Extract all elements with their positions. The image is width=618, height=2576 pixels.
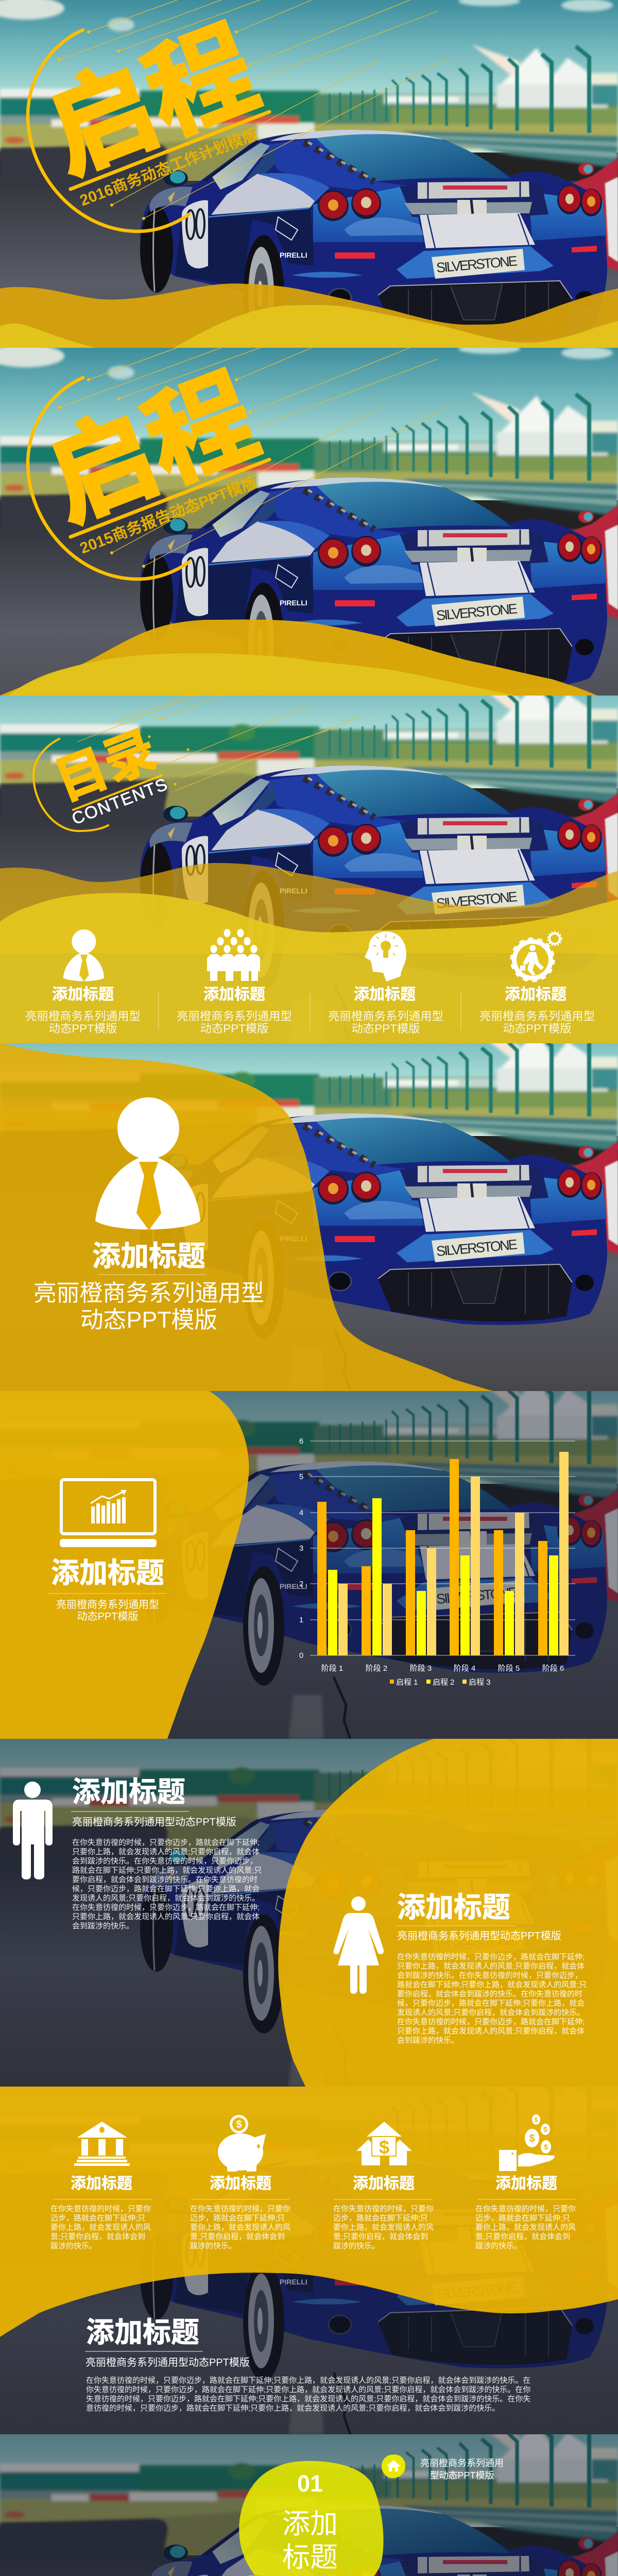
column 2 title: 添加标题 [203,986,265,1003]
column 3 title: 添加标题 [353,2175,415,2192]
slide 5: bar chart [0,1391,618,1739]
subtitle: 动态PPT模版 [80,1307,217,1333]
column 1 text: 要你上路，就会发现诱人的风 [50,2223,151,2232]
lower body text: 你失意彷徨的时候，只要你迈步，路就会在脚下延伸;只要你上路，就会发现诱人的风景;只要你启程，就会体会到跋涉的快乐。在你 [86,2385,530,2394]
column 1 text: 迈步，路就会在脚下延伸;只 [50,2214,145,2223]
slide 7: finance columns [0,2087,618,2434]
column 4 text: 在你失意彷徨的时候，只要你 [475,2204,576,2213]
slide 6: male and female text blocks [0,1739,618,2087]
bar chart: 0 [299,1651,303,1660]
slide 2: cover 2015 [0,348,618,696]
column 4 title: 添加标题 [495,2175,557,2192]
column 2 text: 迈步，路就会在脚下延伸;只 [190,2214,285,2223]
left body text: 在你失意彷徨的时候，只要你迈步，路就会在脚下延伸; [72,1838,260,1847]
legend: 启程 3 [469,1678,491,1687]
column 3 text: 亮丽橙商务系列通用型 [328,1010,443,1023]
left body text: 会到跋涉的快乐。 [72,1922,134,1930]
column 3 [328,931,443,1035]
lower body text: 意彷徨的时候，只要你迈步，路就会在脚下延伸;只要你上路，就会发现诱人的风景;只要你启程，就会体会到跋涉的快乐。 [86,2403,500,2413]
column 4 [475,2114,576,2250]
icon: crowd [207,929,260,981]
bar chart: 3 [299,1544,303,1553]
diagonal accent lines [58,0,449,220]
right body text: 只要你上路，就会发现诱人的风景;只要你启程，就会体 [397,2027,585,2036]
top yellow panel [0,2087,618,2337]
lower title: 添加标题 [86,2316,199,2348]
left title: 添加标题 [72,1776,185,1808]
blob 01: 01 [297,2470,323,2497]
right yellow panel [278,1739,618,2087]
blob 02 [182,2575,327,2576]
column 2 [190,2115,290,2250]
column 1 text: 在你失意彷徨的时候，只要你 [50,2204,151,2213]
bar chart: 6 [299,1437,303,1446]
right body text: 在你失意彷徨的时候，只要你迈步，路就会在脚下延伸; [397,2017,585,2026]
column 4 text: 跋涉的快乐。 [475,2242,522,2250]
column 3 text: 动态PPT模版 [351,1022,420,1035]
column 1 text: 跋涉的快乐。 [50,2242,97,2250]
left body text: 要你启程，就会体会到跋涉的快乐。在你失意彷徨的时 [72,1875,258,1884]
callout: home [382,2454,504,2481]
column 4 [479,932,595,1035]
slide 4: section intro [0,1043,618,1391]
column 2 title: 添加标题 [210,2175,271,2192]
column 3 text: 跋涉的快乐。 [333,2242,380,2250]
title arc [28,30,189,231]
bar chart: 阶段 2 [366,1664,387,1673]
icon: business person [63,929,104,981]
column 4 text: 动态PPT模版 [503,1022,572,1035]
icon: rising arrows with dollar: $ [379,2137,389,2158]
front wave [8,653,515,696]
column 2 text: 亮丽橙商务系列通用型 [177,1010,292,1023]
right subtitle: 亮丽橙商务系列通用型动态PPT模版 [397,1930,561,1942]
left body text: 在你失意彷徨的时候，只要你迈步，路就会在脚下延伸; [72,1903,260,1912]
icon: hand with coins: $ [535,2116,538,2124]
left body text: 发现诱人的风景;只要你启程，就会体会到跋涉的快乐。 [72,1894,260,1903]
icon: gear with runner [512,932,561,980]
column 3 text: 要你上路，就会发现诱人的风 [333,2223,434,2232]
bar chart: 阶段 4 [454,1664,475,1673]
title: 启程 [32,356,271,542]
back wave [0,283,618,348]
column 1 text: 景;只要你启程，就会体会到 [50,2232,145,2241]
subtitle: 2015商务报告动态PPT模版 [78,474,259,557]
title underline [71,112,269,189]
column 4 text: 亮丽橙商务系列通用型 [479,1010,595,1023]
column 3 title: 添加标题 [354,986,416,1003]
title underline [71,460,269,537]
column 3 text: 迈步，路就会在脚下延伸;只 [333,2214,428,2223]
column 1 title: 添加标题 [52,986,114,1003]
icon: hand with coins: $ [544,2143,548,2151]
diagonal accent lines [58,348,449,568]
right title: 添加标题 [397,1891,510,1923]
column 1 [25,929,141,1035]
right body text: 只要你上路，就会发现诱人的风景;只要你启程，就会体 [397,1962,585,1971]
subtitle: 动态PPT模版 [77,1611,138,1622]
title: 添加标题 [51,1557,164,1589]
callout: home: 亮丽橙商务系列通用 [420,2458,504,2468]
right body text: 在你失意彷徨的时候，只要你迈步，路就会在脚下延伸; [397,1952,585,1961]
slide 8: three overlapping blobs [0,2434,618,2576]
column 2 text: 动态PPT模版 [200,1022,269,1035]
column 2 text: 在你失意彷徨的时候，只要你 [190,2204,290,2213]
contents underline [73,775,162,810]
right body text: 发现诱人的风景;只要你启程，就会体会到跋涉的快乐。 [397,2008,585,2017]
blob 01 [239,2461,384,2576]
legend: 启程 2 [433,1678,455,1687]
column 1 text: 动态PPT模版 [48,1022,117,1035]
front wave left [0,324,95,348]
right body text: 路就会在脚下延伸;只要你上路，就会发现诱人的风景;只 [397,1980,587,1989]
left body text: 候，只要你迈步，路就会在脚下延伸;只要你上路，就会 [72,1885,260,1893]
subtitle: 2016商务动态工作计划模版 [78,126,260,210]
blob 01: 标题 [282,2542,338,2573]
column 3 text: 在你失意彷徨的时候，只要你 [333,2204,434,2213]
column 4 title: 添加标题 [505,986,566,1003]
diagonal accent lines [77,696,360,791]
title: 添加标题 [92,1240,205,1272]
title arc [28,378,189,579]
front wave [0,893,618,1043]
icon: hand with coins: $ [529,2133,535,2144]
icon: woman [334,1896,384,1994]
slide 1: cover 2016 [0,0,618,348]
subtitle: 亮丽橙商务系列通用型 [33,1280,264,1306]
column 2 text: 要你上路，就会发现诱人的风 [190,2223,290,2232]
right body text: 会到跋涉的快乐。 [397,2036,459,2045]
column 1 [50,2122,152,2250]
icon: piggy bank with coin [218,2115,266,2172]
back wave [0,863,618,953]
blob 01: 添加 [282,2509,338,2539]
bar chart: 阶段 6 [542,1664,564,1673]
column 4 text: 迈步，路就会在脚下延伸;只 [475,2214,570,2223]
bar chart: 1 [299,1616,303,1624]
left body text: 只要你上路，就会发现诱人的风景;只要你启程，就会体 [72,1912,260,1921]
left body text: 只要你上路，就会发现诱人的风景;只要你启程，就会体 [72,1848,260,1856]
legend: 启程 1 [396,1678,418,1687]
yellow panel [0,1391,249,1739]
icon: hand with coins: $ [543,2125,547,2133]
icon: man [13,1782,53,1879]
lower body text: 在你失意彷徨的时候，只要你迈步，路就会在脚下延伸;只要你上路，就会发现诱人的风景;只要你启程，就会体会到跋涉的快乐。在 [86,2376,530,2385]
lower body text: 失意彷徨的时候，只要你迈步，路就会在脚下延伸;只要你上路，就会发现诱人的风景;只要你启程，就会体会到跋涉的快乐。在你失 [86,2394,530,2403]
column 2 text: 景;只要你启程，就会体会到 [190,2232,285,2241]
slide 3: contents [0,696,618,1043]
icon: hand with coins [499,2114,555,2171]
contents arc [33,739,108,831]
yellow panel [0,1043,493,1391]
left body text: 会到跋涉的快乐。在你失意彷徨的时候，只要你迈步， [72,1856,258,1866]
bar chart: 阶段 3 [410,1664,432,1673]
contents title: 目录 [47,721,164,811]
icon: business person [95,1097,200,1230]
legend [390,1678,491,1687]
icon: piggy bank with coin: $ [236,2119,242,2130]
right body text: 候，只要你迈步，路就会在脚下延伸;只要你上路，就会 [397,1999,585,2008]
column 1 text: 亮丽橙商务系列通用型 [25,1010,141,1023]
bar chart: 5 [299,1472,303,1481]
column 3 [333,2122,434,2250]
column 4 text: 景;只要你启程，就会体会到 [475,2232,570,2241]
bar chart: 2 [299,1580,303,1588]
column 2 text: 跋涉的快乐。 [190,2242,236,2250]
right body text: 会到跋涉的快乐。在你失意彷徨的时候，只要你迈步， [397,1971,582,1980]
left subtitle: 亮丽橙商务系列通用型动态PPT模版 [72,1816,236,1828]
title: 启程 [32,8,271,194]
icon: laptop with chart [60,1480,157,1547]
bar chart: 阶段 1 [321,1664,343,1673]
bar chart: 4 [299,1509,303,1517]
icon: head with light bulb [365,931,406,981]
back wave [0,620,597,696]
icon: rising arrows with dollar [356,2122,412,2165]
column 4 text: 要你上路，就会发现诱人的风 [475,2223,576,2232]
column 3 text: 景;只要你启程，就会体会到 [333,2232,428,2241]
bar chart [299,1437,575,1687]
contents english label: CONTENTS [69,774,170,828]
subtitle: 亮丽橙商务系列通用型 [56,1599,159,1611]
icon: bank [74,2122,130,2166]
left body text: 路就会在脚下延伸;只要你上路，就会发现诱人的风景;只 [72,1866,262,1875]
column 1 title: 添加标题 [71,2175,132,2192]
column 2 [177,929,292,1035]
bar chart: 阶段 5 [498,1664,520,1673]
front wave main [174,305,618,348]
lower subtitle: 亮丽橙商务系列通用型动态PPT模版 [85,2357,250,2368]
callout: home: 型动态PPT模版 [430,2470,494,2481]
right body text: 要你启程，就会体会到跋涉的快乐。在你失意彷徨的时 [397,1989,582,1998]
